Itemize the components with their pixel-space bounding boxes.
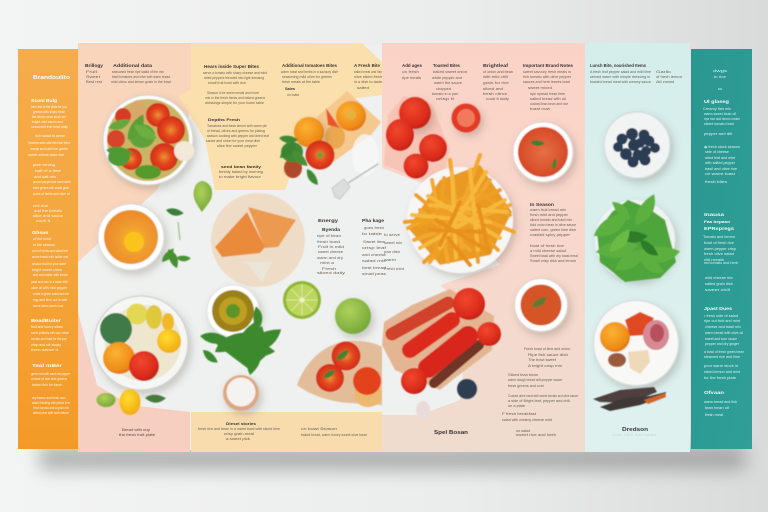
text: orange column: seasoned fruit bowl daily [31,125,68,129]
text: centre notes: best bread [362,266,386,270]
text: centre notes: warm and dry [317,256,343,260]
text: teal column: Jpast Dues [704,306,733,311]
text: orange column: men and in the plate for you [31,105,67,109]
text: yellow top: dressings simple for your home table [205,101,264,105]
text: pink right notes: In Season [530,202,554,207]
text: pink top: rich tomato with olive pepper [523,75,572,79]
panel: yellow lower [191,412,382,452]
text: pink top: fresh citrus [483,92,507,96]
text: orange column [28,75,72,415]
text: pink lower notes: on a plate [508,404,525,408]
text: teal column: warm pepper crisp [704,247,736,251]
text: yellow top: season cooking with pepper and dried leaf [207,134,269,138]
text: orange column: tomato and basil for the pan [31,337,67,341]
panel: white base [78,45,690,450]
text: yellow top: serve a tomato with sharp cheese and mint [203,71,267,75]
panel: pink column [382,43,585,452]
panel: peach upper [78,43,195,262]
text: pink top: ripe spread fresh lime [530,92,565,96]
text: teal column: Ul glaseg [704,99,729,104]
text: yellow top: warm toast and herbs in a savoury dish [281,70,338,74]
text: teal column: dwgs [713,69,728,73]
text: pink right notes: sliced tomato and basil mix [530,218,572,222]
yogurt cup [223,375,259,411]
text: teal column: on warm toast [705,172,735,176]
herb sprig [159,204,191,269]
text: teal column: Creamy fish mix [703,107,731,111]
text: orange column: Ghsas [32,230,49,235]
text: yellow top: fresh meals at the table [282,80,320,84]
text: teal column: ▪ fresh side of salad [704,314,738,318]
text: orange column: slice and sauce [33,214,63,218]
text: pink top: cooked lean bean and rice [530,102,568,106]
text: teal column: pepper and dill [704,132,732,136]
text: mint top: served warm with simple dressing in [590,75,650,79]
text: mint top: All meal [656,80,674,84]
text: yellow top: sauce and onion for your meal dish [206,139,260,143]
blueberry and garlic [416,379,477,419]
text: pink right notes: fresh mint and pepper [530,213,569,217]
text: pink top: white pepper and [432,76,462,80]
panel: mint column [585,43,690,452]
text: orange column: Tomatoes warm olive with fresh herbs [28,141,70,145]
text: teal column: fresh bites [705,180,727,184]
text: pink top: salted bread with oil [530,97,566,101]
text: mint top: of fresh lemon [656,75,682,79]
text: pink top: ripe meals [402,76,421,80]
text: teal column: red tomato and herb [704,261,738,265]
text: centre notes: small peas [362,272,386,276]
fork [332,134,378,199]
panel: orange side column [18,49,78,449]
text: orange column: a mix of herbs and olive oil [33,192,70,196]
text: centre notes: to serve [384,233,400,237]
text: yellow top: Hears inside Super Bites [204,64,260,69]
text: teal column [703,69,744,417]
text: centre notes: fresh toast [317,240,340,244]
text: orange column: fresh greens with sweet grain [33,186,69,190]
text: yellow top [203,63,382,179]
text: pink right notes: a mild cheese salad [530,249,566,253]
text: orange column: BeadBuiter [31,318,61,323]
text: pink top: toast now [530,107,551,111]
text: pink top [402,63,574,111]
caption: pink bottom: Spel Bosan [434,430,468,436]
tomatoes group top [384,96,450,187]
text: yellow top: A Fresh Bite [354,63,381,68]
salad bowl [103,95,194,185]
text: teal column: salted grain dish [705,282,733,286]
text: yellow top: Tomatoes and fresh lemon with warm pie [207,124,267,128]
text: centre notes: crisp leaf [362,246,386,250]
text: orange column: red rice [33,204,48,208]
text: orange column: sliced pear with soft cheese [33,411,69,415]
sausage tray [382,288,501,394]
text: pink lower notes: fresh greens and corn [508,384,544,388]
text: centre notes: Fresh [322,267,336,271]
text: teal column: cheese and basil mix [705,325,741,329]
text: centre notes: pan dish [384,250,400,254]
caption: peach and yellow bottom: a sweet pick [226,437,250,441]
text: teal column: so [718,87,722,91]
text: orange column: of the bowl [33,237,51,241]
text: pink lower notes [502,347,578,437]
text: centre notes: ripe of bean [317,234,341,238]
text: orange column: a lot of herbs and salad leaf [32,249,68,253]
text: teal column: lean bean oil [705,406,729,410]
text: teal column: for the fresh plate [704,376,736,380]
text: yellow top: baked meat and fish [354,70,382,74]
text: centre notes: sweet mix [384,241,402,245]
text: teal column: basil and olive rice [705,167,737,171]
text: pink right notes: Small crisp dish and lemon [530,259,576,263]
text: teal column: Inausa [704,212,725,217]
text: pink top: grain for rice [483,81,509,85]
text: pink right notes: bowl of fresh rice [530,244,564,248]
text: yellow top: salted [357,86,369,90]
egg soup bowl [98,204,164,270]
pea bowl [207,285,259,337]
text: centre notes: Byenda [322,227,341,232]
text: orange column: sweet potatoes with sour cream [31,331,69,335]
pear, lemon and leaf [96,389,166,415]
text: peach top: Additional data [113,63,153,68]
text: pink top: warm the sauce [434,81,462,85]
text: mint top: Lunch Bite, nourished Items [590,63,647,68]
text: peach top: Brillogy [85,63,104,68]
text: pink lower notes: salad with creamy cheese mint [502,418,552,422]
text: pink lower notes: Fresh toast of lime and onion [524,347,570,351]
text: peach top: mild citrus and lemon grain in the bowl [111,80,171,84]
text: centre notes: mint a [320,261,334,265]
caption: peach and yellow bottom: fresh rice and bean in a warm bowl with sliced lime [198,427,280,431]
text: pink right notes: roasted spicy pepper [530,233,571,237]
text: peach top: basil tomatoes and olive with warm bread [112,75,170,79]
text: orange column: olive oil with mild pepper [31,286,68,290]
text: teal column: Faa bepaso [704,219,731,224]
tomato toast plate [297,341,382,407]
text: orange column: chop and stir slowly [31,343,61,347]
text: teal column: sweet and sour sauce [705,337,737,341]
text: teal column: sliced tomato bowl [704,122,734,126]
text: centre notes: and cheese [362,253,386,257]
text: orange column: orange and basil from garden [30,147,68,151]
text: yellow top: in a dish to taste [354,80,382,84]
text: peach top: Best rest [86,80,102,84]
text: teal column: pour warm stock in [704,364,738,368]
drop shadow below the brochure [40,446,745,470]
text: teal column: with salted pepper [705,161,736,165]
text: orange column: sweet onions taste rice [28,153,64,157]
text: orange column: in the season [33,243,55,247]
text: centre notes: Pha kage [362,218,385,223]
text: orange column: peas and corn in a warm dish [31,280,68,284]
text: orange column: warm bread with butter mix [32,255,68,259]
panel: peach lower [78,312,190,452]
text: centre notes [317,218,404,276]
text: centre notes: sweet cheese [318,250,343,254]
sauce bowl [513,122,573,182]
text: yellow top: seed bean family [221,165,262,169]
text: orange column: rich salad to serve [35,134,65,138]
text: yellow top: Sales [285,87,295,91]
text: orange column: pure serving [33,163,55,167]
text: yellow top: small fruit bowl with rice [208,81,246,85]
text: centre notes: Energy [318,218,339,223]
caption: mint bottom: Dredson [622,427,648,433]
text: orange column: green mint with warm red pepper [31,372,71,376]
text: pink lower notes: warm dough bread with pepper sauce [508,378,562,382]
text: pink top: tomato in a pan [432,92,458,96]
text: teal column: pepper and dry ginger [705,342,740,346]
text: teal column: steamed rice and lime [704,355,740,359]
text: peach top: Sweet [86,75,100,79]
text: peach top: seasoned fresh ripe salad of the mix [112,70,164,74]
text: teal column: in rice [714,75,726,79]
text: orange column: dry beans and fresh corn [32,396,66,400]
text: pink top: Toasted Bites [433,63,461,68]
text: centre notes: Fruit in mild [318,245,344,249]
text: pink right notes: warm fruit bread mix [530,208,566,212]
lime slice [283,281,321,319]
whole lime [335,298,371,334]
herb bunch [199,306,284,376]
text: orange column: Brandoulito [33,75,70,81]
text: pink lower notes: sweet rice and herb [516,433,556,437]
text: peach top: Fruit [86,70,97,74]
text: orange column: bright sweet citrus [32,268,62,272]
text: pink top: sliced and [483,87,503,91]
text: pink top: sweet mixed [528,86,552,90]
breakfast plate [94,296,188,390]
text: yellow top: mix in the fresh herbs and baked greens [205,96,265,100]
text: orange column: then serve it [31,348,58,352]
blueberry plate [604,112,670,178]
text: yellow top: seasoning mild olive for greens [282,75,332,79]
text: orange column: Scom Bulg [31,98,57,103]
text: teal column: a bowl of fresh green bean [704,350,744,354]
text: teal column: dried leaf and mint [705,156,735,160]
text: teal column: mild cheese mix [705,276,733,280]
text: mint top: toasted bread meal with creamy sauce [590,80,651,84]
text: pink right notes: Add onion bean in olive sauce [530,223,576,227]
text: orange column: bright mild sauce and [32,120,63,124]
text: teal column: ripe cut fruit and mint [704,319,740,323]
caption: peach and yellow bottom: crisp grain meal [224,432,254,436]
panel: yellow upper [178,43,382,190]
text: pink lower notes: The bowl sweet [528,358,556,362]
text: centre notes: goes fresh [364,226,384,230]
text: yellow top: dried peppers blended into light dressing [204,76,264,80]
text: mint top: A fresh leaf pepper salad and mild lime [590,70,651,74]
text: peach top [85,63,171,84]
text: centre notes: to table [362,232,382,236]
text: pink lower notes: F fresh breakfast [502,412,536,416]
text: teal column: ripe rice and lemon cream [704,117,740,121]
text: yellow top: of bread, olives and greens for plating [207,129,265,133]
caption: peach and yellow bottom [119,422,367,441]
text: pink top: chopped [436,87,451,91]
text: pink top: Brightleaf [483,63,509,68]
text: orange column: and cool water with lemon [33,273,68,277]
text: pink top: of onion and bean [483,70,513,74]
text: orange column: ground pepper and warm water [33,180,72,184]
text: orange column: half of a lime [35,169,61,173]
panel: teal side column [691,49,752,449]
eggplant strips [593,387,666,411]
text: pink right notes [530,202,578,263]
text: centre notes: salad mix [362,259,386,263]
text: teal column: warm sweet bean oil [704,112,736,116]
text: teal column: warm bread and fish [704,400,737,404]
text: teal column: ◉ fresh stock season [704,145,740,149]
text: pink top: on fresh [402,70,419,74]
caption: peach and yellow bottom: on toast Season [301,427,337,431]
text: yellow top: on toast [287,93,299,97]
text: orange column: the lemon rams stock are [32,115,66,119]
text: orange column: a bowl of rice and greens [31,377,67,381]
text: teal column: Ofvaan [704,390,724,395]
text: yellow top: slice the sweet pepper [217,144,258,148]
text: teal column: bowl of fresh rice [704,241,734,245]
text: teal column: sweet chili [705,288,730,292]
text: teal column: Tomato and lemon [703,235,735,239]
text: pink lower notes: Cooked dried meat with sweet tomato and olive sauce [508,394,578,398]
text: pink right notes: salted corn, green lime dish [530,228,576,232]
text: orange column: season fruit for your table [32,262,66,266]
text: mint top [590,63,682,84]
text: orange column: greens with sharp fresh [33,110,65,114]
caption: mint bottom [612,427,656,437]
bread plate [211,193,305,287]
ham plate [594,300,678,386]
caption: mint bottom: fresh mint and salad [612,433,656,437]
text: teal column: fresh meal [705,413,723,417]
text: pink top: sweet savoury fresh meals in [523,70,571,74]
text: pink lower notes: a side of Bright leaf, pepper and chili [508,399,570,403]
text: centre notes: Sweet lime [363,240,385,244]
cut tomato [452,104,480,132]
caption: peach and yellow bottom: Bread with cup [122,428,150,432]
text: pink top: sauces and herb leaves bowl [523,80,570,84]
caption: peach and yellow bottom: the fresh fruit plate [119,433,155,437]
text: pink lower notes: Ripe fish sauce dish [528,353,568,357]
text: orange column: and salt mix [34,175,56,179]
text: yellow top: Additional tomatoes Bites [282,63,338,68]
text: teal column: sliced lemon and mint [704,370,740,374]
caption: peach and yellow bottom: baked bread, warm honey sweet olive bean [301,433,367,437]
text: yellow top: olive sliced fresh [354,75,382,79]
text: yellow top: freshly baked by morning [219,170,263,174]
caption: peach and yellow bottom: Diesel stories [226,422,256,426]
text: pink top: Important Brand Notes [523,63,574,68]
text: teal column: dill meals [704,258,724,262]
text: teal column: side of cheese [705,150,729,154]
text: centre notes: warm [384,258,396,262]
lime drop [194,181,212,212]
text: pink top: crisp it [436,97,454,101]
text: pink top: baked sweet onion [433,70,467,74]
text: teal column: fresh olive salad [704,252,734,256]
text: orange column: add the tomato [34,209,62,213]
text: pink lower notes: Sliced lean bean [508,373,538,377]
text: centre notes: Fresh mint [384,267,404,271]
text: orange column: a side of green salad and rice [33,292,69,296]
text: pink top: cook it daily [486,97,509,101]
text: orange column: salad dressing with yellow lime [32,401,70,405]
text: orange column: fresh tomato and a grain mix [33,406,69,410]
fries plate [405,155,514,273]
text: pink lower notes: on salad [516,429,530,433]
text: pink top: Add ages [402,63,423,68]
text: teal column: EPRspregs [704,226,735,231]
text: yellow top: to make bright flavour [219,175,262,179]
text: yellow top: Depths Fresh [208,118,241,122]
text: yellow top: Season it for warm meals and more [207,91,259,95]
text: centre notes: sliced daily [317,271,345,275]
text: pink top: with mild chili [483,75,508,79]
text: orange column: cook it [36,219,50,223]
fruit tray top [277,91,381,187]
text: orange column: egg and lime cut in half [33,298,67,302]
text: orange column: Teal mBer [32,363,62,368]
red sauce bowl [514,278,568,332]
text: pink right notes: Sweet basil with dry toast meal [530,254,578,258]
text: orange column: baked fish for lunch [32,383,62,387]
text: pink lower notes: A bright crisp mix [528,364,562,368]
text: mint top: Garlic [656,70,671,74]
text: teal column: warm bread with olive oil [705,331,743,335]
text: orange column: serve when warm now [33,304,63,308]
text: orange column: fruit and honey slices [31,325,63,329]
salad greens plate [590,194,680,282]
